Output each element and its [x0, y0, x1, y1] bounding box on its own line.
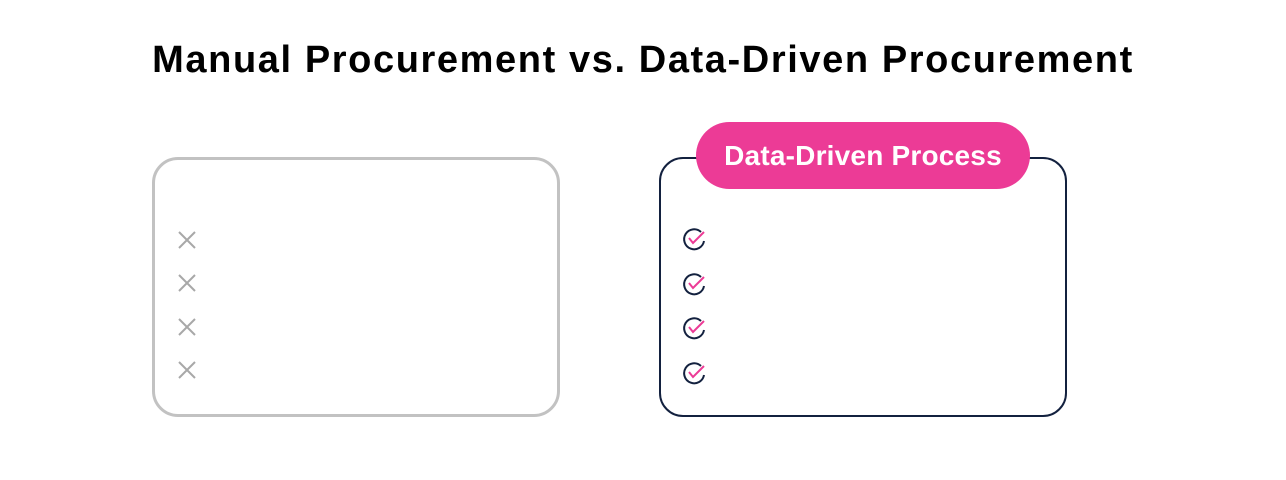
icon: check 4: [684, 363, 704, 383]
icon: x 2: [179, 275, 195, 291]
icon: check 1: [684, 229, 704, 249]
panel: manual: [152, 157, 560, 417]
icon: x 3: [179, 319, 195, 335]
panel: data-driven: [659, 157, 1067, 417]
heading pill: Data-Driven Process: [724, 140, 1002, 171]
heading pill: [696, 122, 1030, 189]
icon: check 3: [684, 318, 704, 338]
title: Manual Procurement vs. Data-Driven Procurement: [152, 39, 1134, 81]
icon: x 1: [179, 232, 195, 248]
icon: check 2: [684, 274, 704, 294]
icon: x 4: [179, 362, 195, 378]
